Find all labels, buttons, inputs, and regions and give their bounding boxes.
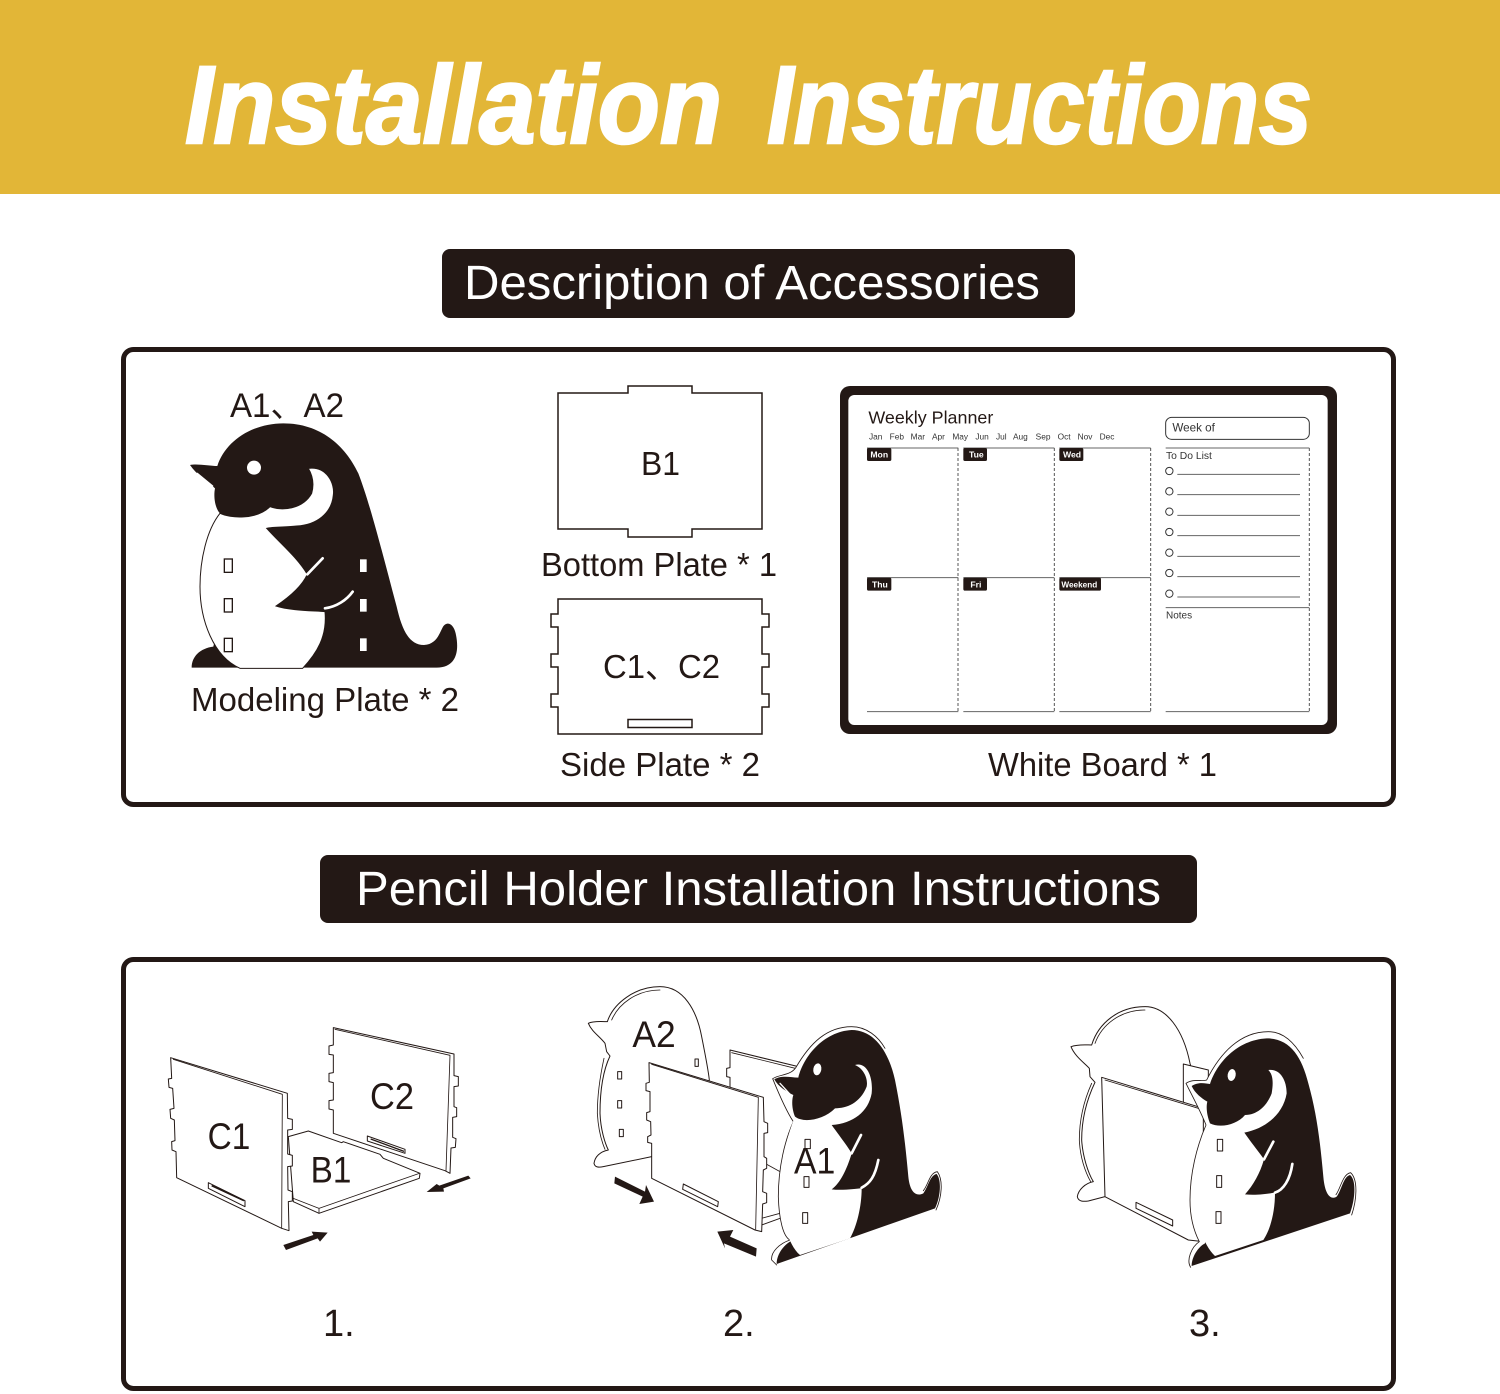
title banner: Instructions: [767, 44, 1312, 167]
penguin A1: A1: [794, 1140, 835, 1182]
week of box: Week of: [1172, 422, 1216, 435]
week of box: [1166, 417, 1309, 439]
front plate: [1102, 1077, 1203, 1242]
step 3 number: 3.: [1189, 1303, 1221, 1345]
front plate: [646, 1063, 768, 1232]
day columns: Thu: [872, 579, 888, 589]
day columns: Wed: [1063, 450, 1081, 460]
icon: bottom plate: [558, 386, 762, 537]
day columns: Weekend: [1061, 579, 1097, 589]
label: white board: White Board * 1: [988, 746, 1217, 783]
months row: Jul: [996, 431, 1007, 441]
day columns: [867, 448, 1151, 712]
months row: May: [952, 431, 969, 441]
arrow: left push: [427, 1176, 471, 1192]
white board: [840, 386, 1337, 734]
rear penguin outline: [1071, 1007, 1203, 1201]
notes: Notes: [1166, 611, 1192, 622]
months row: [869, 431, 1114, 441]
step 3 diagram: [1071, 1007, 1356, 1267]
board title: Weekly Planner: [868, 408, 994, 428]
day columns: Mon: [870, 450, 888, 460]
back plate: [727, 1050, 798, 1225]
months row: Sep: [1036, 431, 1051, 441]
plate C2: C2: [370, 1075, 414, 1117]
months row: Dec: [1100, 431, 1114, 441]
arrow: right push: [283, 1232, 328, 1250]
heading: description of accessories: Description of Accessories: [464, 257, 1040, 310]
label: side plate: Side Plate * 2: [560, 746, 760, 783]
penguin A1 assembled: [1186, 1032, 1356, 1267]
panel: assembly steps: [124, 960, 1394, 1388]
months row: Mar: [911, 431, 925, 441]
months row: Jun: [975, 431, 989, 441]
to do list: [1166, 448, 1309, 712]
notes: [1166, 608, 1309, 712]
icon: bottom plate: B1: [641, 445, 680, 482]
plate B1: [288, 1131, 420, 1213]
step 2 number: 2.: [723, 1303, 755, 1345]
icon: side plate: C1、C2: [603, 648, 720, 685]
label: A1 A2: A1、A2: [230, 387, 344, 425]
months row: Aug: [1013, 431, 1028, 441]
label: bottom plate: Bottom Plate * 1: [541, 546, 777, 583]
months row: Oct: [1058, 431, 1071, 441]
title banner: [0, 0, 1500, 194]
panel: accessories: [124, 350, 1394, 804]
rear plate edge: [1183, 1064, 1208, 1110]
months row: Apr: [932, 431, 945, 441]
plate C1: C1: [208, 1115, 250, 1157]
day columns: Tue: [969, 450, 984, 460]
penguin A2 outline: [588, 987, 709, 1167]
arrow: push right: [614, 1177, 654, 1204]
heading: pencil holder instructions: [320, 855, 1197, 923]
icon: modeling plate penguin: [190, 423, 457, 668]
plate C2: [329, 1028, 458, 1173]
step 2 diagram: [588, 987, 941, 1265]
step 1 diagram: [168, 1028, 471, 1250]
to do list: To Do List: [1166, 451, 1212, 462]
months row: Feb: [890, 431, 904, 441]
months row: Nov: [1078, 431, 1093, 441]
penguin A2 outline: A2: [632, 1013, 676, 1055]
plate C1: [168, 1058, 292, 1231]
title banner: Installation: [185, 44, 722, 167]
plate B1: B1: [311, 1148, 351, 1190]
step 1 number: 1.: [323, 1303, 355, 1345]
icon: side plate: [551, 599, 769, 734]
months row: Jan: [869, 431, 883, 441]
heading: pencil holder instructions: Pencil Holder Installation Instructions: [356, 863, 1161, 916]
arrow: push left: [717, 1230, 757, 1257]
day columns: Fri: [970, 579, 981, 589]
penguin A1: [772, 1027, 941, 1265]
label: modeling plate: Modeling Plate * 2: [191, 681, 459, 718]
heading: description of accessories: [442, 249, 1075, 318]
